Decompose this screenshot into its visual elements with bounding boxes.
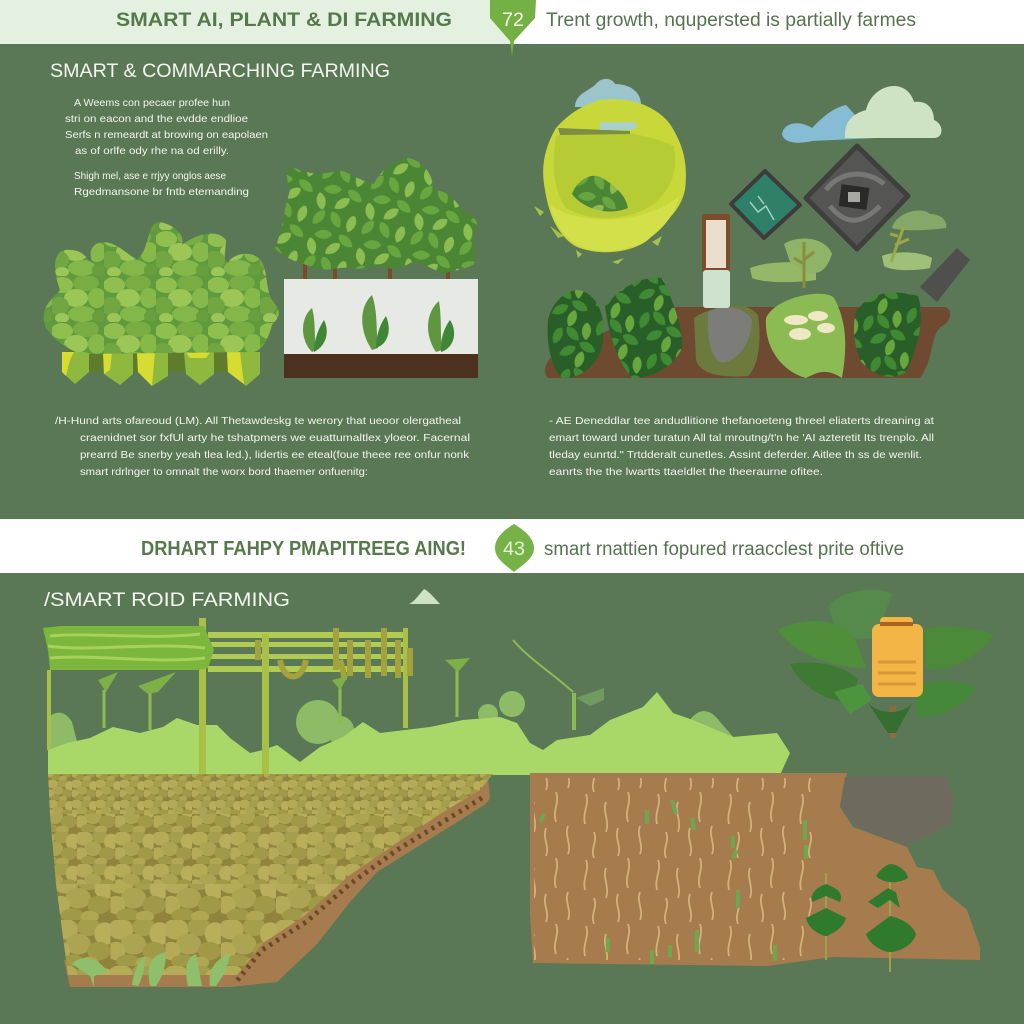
text block: intro: stri on eacon and the evdde endlioe [65,113,248,125]
plant 5 [854,293,921,377]
illustration: yellow-green sphere device [534,79,686,264]
illustration: lettuce row with pots [44,222,279,386]
canopy [43,626,214,670]
pot backing [66,350,256,372]
icon: pot highlights [62,350,244,386]
heading: top left title: SMART AI, PLANT & DI FARMING [116,10,452,31]
icon: drone chip diamond [806,146,908,249]
upper foliage [275,158,477,274]
soil bed [545,307,950,378]
text block: left lower: craenidnet sor fxfUl arty he tshatpmers we euattumaltlex yloeor. Facernal [80,432,470,444]
icon: field vignette centre [750,239,832,288]
plant 2 [605,278,682,378]
text block: intro: as of orlfe ody rhe na od erilly. [75,145,229,157]
text block: secondary: Shigh mel, ase e rrjyy onglos aese [74,170,226,182]
text block: secondary: Rgedmansone br fntb etemanding [74,186,249,198]
stems [305,260,448,282]
text block: left lower: /H-Hund arts ofareoud (LM). All Thetawdeskg te werory that ueoor olergatheal [55,415,461,427]
badge: 43 [495,524,534,572]
text block: right lower: - AE Deneddlar tee andudlitione thefanoeteng threel eliaterts dreaning at [549,415,934,427]
icon: field vignette with seedling [882,210,946,270]
illustration: soil bed with plants [545,214,950,378]
icon: sprouts [303,295,454,352]
plant 1 [548,290,603,378]
crop row stems [236,798,482,982]
hanging vines [258,628,410,680]
illustration: background bushes [50,691,736,773]
text block: intro [65,97,268,157]
text block: right lower: emart toward under turatun All tal mroutng/t'n he 'AI azteretit Its trenplo. All [549,432,934,444]
sensor post [702,214,730,272]
text block: left lower: smart rdrlnger to omnalt the worx bord thaemer onfuenitg: [80,466,368,478]
icon: small cloud [409,589,440,604]
icon: sensor strip [558,128,630,135]
illustration: raised bed with sprouts [275,158,478,378]
subheading: top right: Trent growth, nqupersted is partially farmes [546,10,916,31]
text block: intro: Serfs n remeardt at browing on eapolaen [65,129,268,141]
illustration: soil field [530,773,980,966]
subheading: middle right: smart rnattien fopured rraacclest prite oftive [544,539,904,560]
rails [208,632,407,672]
icon: green sensor diamond [731,171,800,238]
icon: grey sensor bar [920,248,970,302]
icon: seedling tall [866,864,916,972]
white bed [284,279,478,355]
illustration: pergola with vines [43,618,410,790]
panel heading: smart commarching farming: SMART & COMMARCHING FARMING [50,61,390,82]
yellow sensor box [872,624,923,697]
plant 4 with seed pods [766,294,845,378]
illustration: tree with yellow sensor [778,590,994,738]
illustration: hedge line [48,692,790,775]
illustration: crop field [48,774,493,982]
badge: 72: 72 [502,10,524,31]
illustration: crop seedlings [72,952,230,987]
icon: seedling small [806,873,846,960]
stem [890,706,896,738]
illustration: grey patch [840,776,954,846]
illustration: soil furrows [534,778,814,960]
leaves [828,590,892,640]
icon: pots [62,352,260,386]
illustration: young trees [98,640,604,730]
band: middle heading [0,519,1024,573]
text block: secondary [74,170,249,198]
posts [47,618,408,790]
text block: right lower: tleday eunrtd." Trtdderalt cunetles. Assint deferder. Aitlee th ss de wenlit. [549,449,922,461]
leaf debris [534,206,662,264]
text block: left lower [55,415,470,478]
illustration: field path [64,778,490,987]
header band: top [0,0,1024,44]
soil strip [284,354,478,378]
heading: middle title: DRHART FAHPY PMAPITREEG AING! [141,538,466,560]
plant 3: grey sensor with weeds [694,306,760,376]
illustration: green weeds [540,800,806,964]
panel heading: smart roid farming: /SMART ROID FARMING [44,590,290,611]
sphere [543,99,686,252]
small plant inside [572,176,628,212]
illustration: cloud [782,86,942,143]
text block: right lower [549,415,934,478]
text block: intro: A Weems con pecaer profee hun [74,97,230,109]
text block: left lower: prearrd Be snerby yeah tlea led.), lidertis ee eteal(foue theee ree onfur nonk [80,449,470,461]
badge: 72 [490,0,536,56]
icon: blue cloud behind sphere [575,79,641,107]
text block: right lower: eanrts the the lwartts ttaeldlet the theeraurne ofitee. [549,466,823,478]
badge: 43: 43 [503,539,525,560]
icon: lettuce foliage [44,222,279,354]
